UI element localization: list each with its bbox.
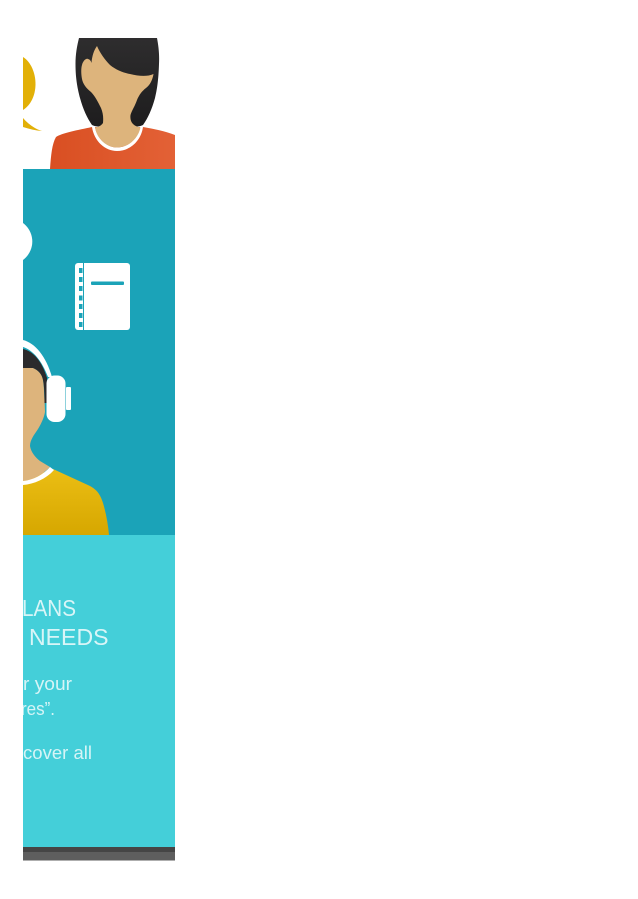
icon: white circle — [23, 223, 32, 260]
headphone side pad — [66, 387, 71, 410]
woman shirt — [50, 127, 175, 169]
man neck and face — [23, 368, 50, 481]
body text: cover all — [23, 743, 92, 763]
icon: notebook — [75, 263, 130, 330]
woman hair — [76, 38, 159, 126]
man shirt — [23, 469, 109, 535]
body text: res”. — [21, 699, 55, 719]
footer bar — [23, 847, 175, 860]
illustration: man with headphones — [23, 340, 109, 535]
body text — [23, 680, 91, 759]
headphone ear cup — [46, 376, 66, 422]
illustration: woman avatar — [50, 38, 175, 169]
icon: yellow speech bubble — [23, 57, 42, 131]
man collar — [23, 467, 54, 485]
headphone band — [23, 340, 52, 377]
heading — [24, 600, 108, 645]
woman collar — [92, 127, 143, 151]
heading: LANS — [22, 595, 76, 621]
woman face and neck — [81, 46, 154, 148]
man hair — [23, 349, 47, 403]
body text: r your — [23, 674, 72, 694]
heading: NEEDS — [29, 624, 108, 650]
infographic canvas — [23, 38, 175, 860]
panel: light teal text section — [21, 535, 175, 848]
panel: teal illustration section — [23, 169, 175, 535]
